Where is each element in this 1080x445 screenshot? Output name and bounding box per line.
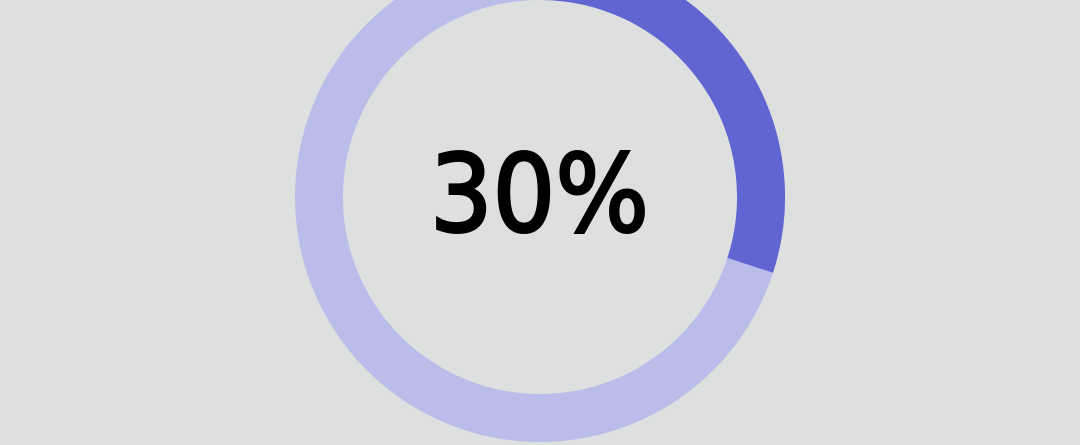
donut ring track xyxy=(319,0,761,418)
percentage label: 30% xyxy=(430,133,649,257)
donut ring value segment xyxy=(540,0,761,265)
